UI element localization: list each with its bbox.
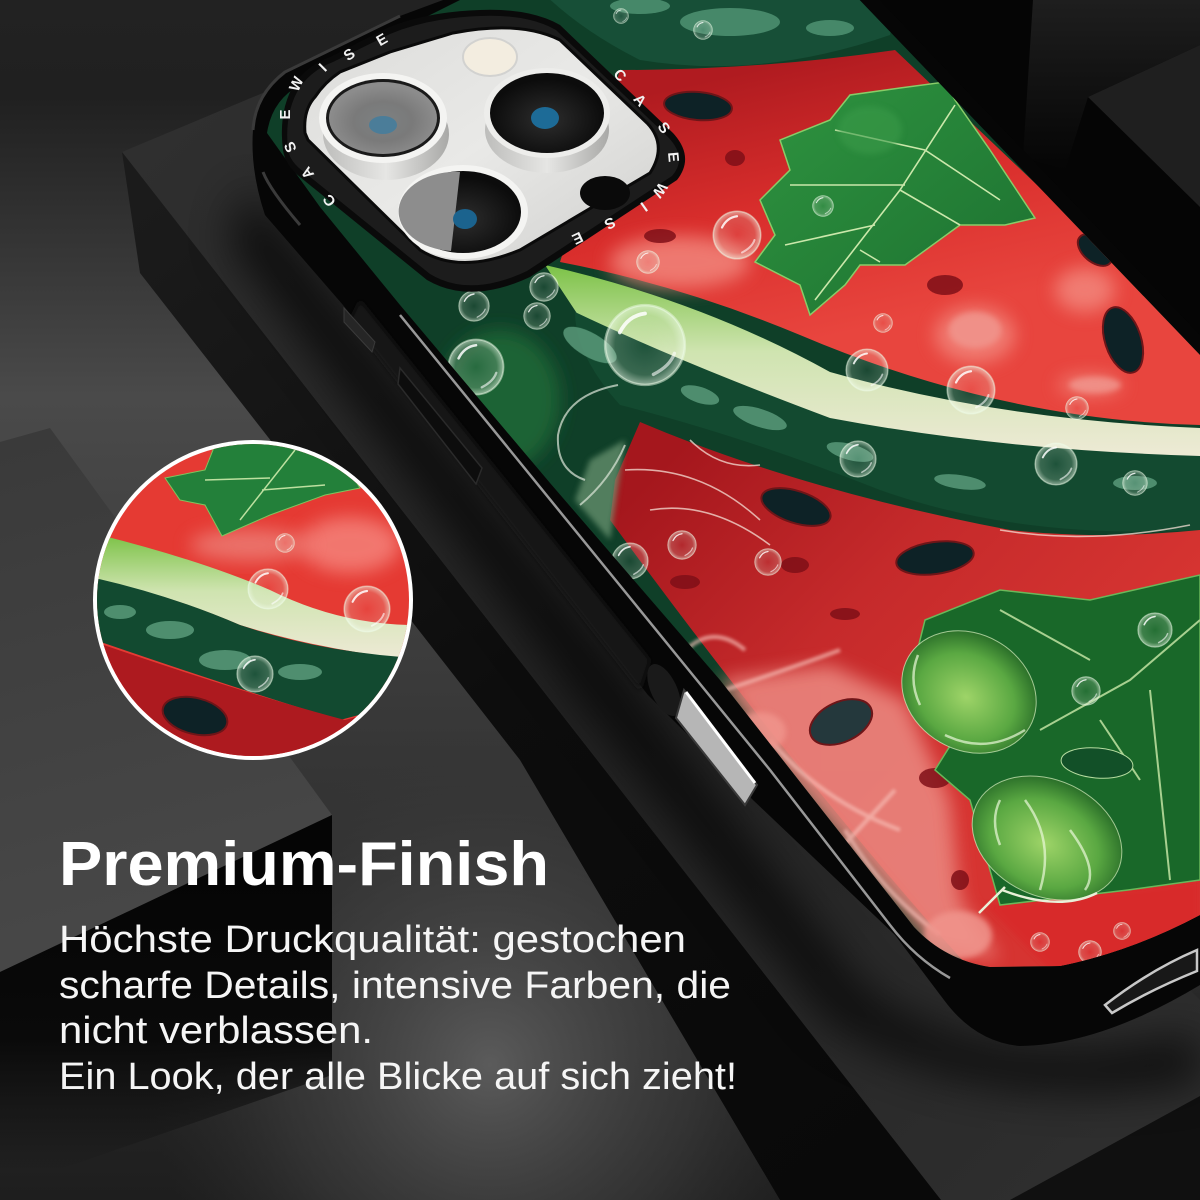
inset leaf	[165, 440, 360, 536]
inset droplets	[248, 569, 288, 609]
body text: Höchste Druckqualität: gestochen	[59, 919, 686, 961]
darker pits	[644, 150, 969, 890]
side button: volume	[398, 368, 482, 484]
bottom red flesh	[992, 882, 1200, 966]
charging port	[1105, 950, 1197, 1013]
inset seed	[162, 696, 228, 736]
large leaf droplet two	[972, 776, 1122, 900]
top skin mottling	[610, 0, 854, 36]
camera island	[277, 10, 685, 292]
brand text: left: CASEWISE	[277, 30, 391, 210]
skin mottling	[558, 320, 1157, 493]
side button sheen	[686, 692, 755, 783]
flash	[463, 38, 517, 76]
side switch	[344, 308, 375, 352]
lower flesh lines	[688, 637, 940, 935]
upper red flesh	[560, 50, 1200, 425]
phone case body	[252, 0, 1200, 1046]
phone screen artwork: watermelon	[250, 0, 1200, 980]
brand text: right: CASEWISE	[569, 66, 682, 248]
inset skin mottling	[104, 605, 322, 680]
body text	[59, 919, 737, 1098]
dark green melon skin	[575, 312, 1200, 532]
inset detail magnifier circle	[90, 440, 420, 770]
dark skin at top	[540, 0, 900, 66]
faint large bubble outline	[558, 385, 625, 505]
lens: upper left	[319, 73, 449, 180]
body text: Ein Look, der alle Blicke auf sich zieht!	[59, 1056, 737, 1098]
phone drop shadow	[230, 190, 1200, 1089]
background block: lower left step	[0, 428, 332, 1190]
seeds	[663, 89, 1151, 754]
lens: upper right	[484, 68, 610, 173]
heading: Premium-Finish	[59, 830, 549, 899]
background block: upper right	[850, 0, 1200, 700]
inset pale rind	[98, 535, 415, 660]
mint leaf: lower	[879, 575, 1200, 924]
lens: bottom	[398, 165, 528, 259]
pale melon rind	[545, 265, 1200, 458]
droplet highlights	[913, 655, 1090, 890]
inset pale flesh patches	[300, 517, 400, 573]
case side sheen	[350, 300, 650, 690]
inset lower flesh	[104, 645, 356, 756]
body text: nicht verblassen.	[59, 1010, 373, 1052]
lettering band	[287, 16, 679, 285]
white highlight lines	[625, 440, 1190, 545]
small oval leaf droplet	[1060, 747, 1134, 779]
curved stem tail	[979, 887, 1097, 913]
island black frame	[282, 10, 685, 292]
water droplets	[448, 8, 1172, 963]
inset dark skin	[95, 578, 415, 720]
screen edge highlight	[400, 315, 950, 978]
background: floor light pool	[100, 700, 900, 1200]
soft green glow	[440, 330, 560, 470]
flesh soft highlights	[610, 236, 1122, 395]
side button: silver camera control	[676, 690, 757, 805]
body text: scharfe Details, intensive Farben, die	[59, 965, 731, 1007]
large leaf droplet	[901, 630, 1037, 754]
island glass plate	[305, 28, 658, 263]
lower red flesh	[610, 422, 1200, 980]
pale flesh patches	[734, 312, 1121, 959]
pale green smear left of flesh	[575, 440, 625, 540]
camera control recess	[640, 659, 688, 721]
sensor cutout	[580, 176, 630, 210]
lower flesh pink wash	[720, 665, 1000, 960]
mint leaf: upper	[755, 82, 1035, 315]
